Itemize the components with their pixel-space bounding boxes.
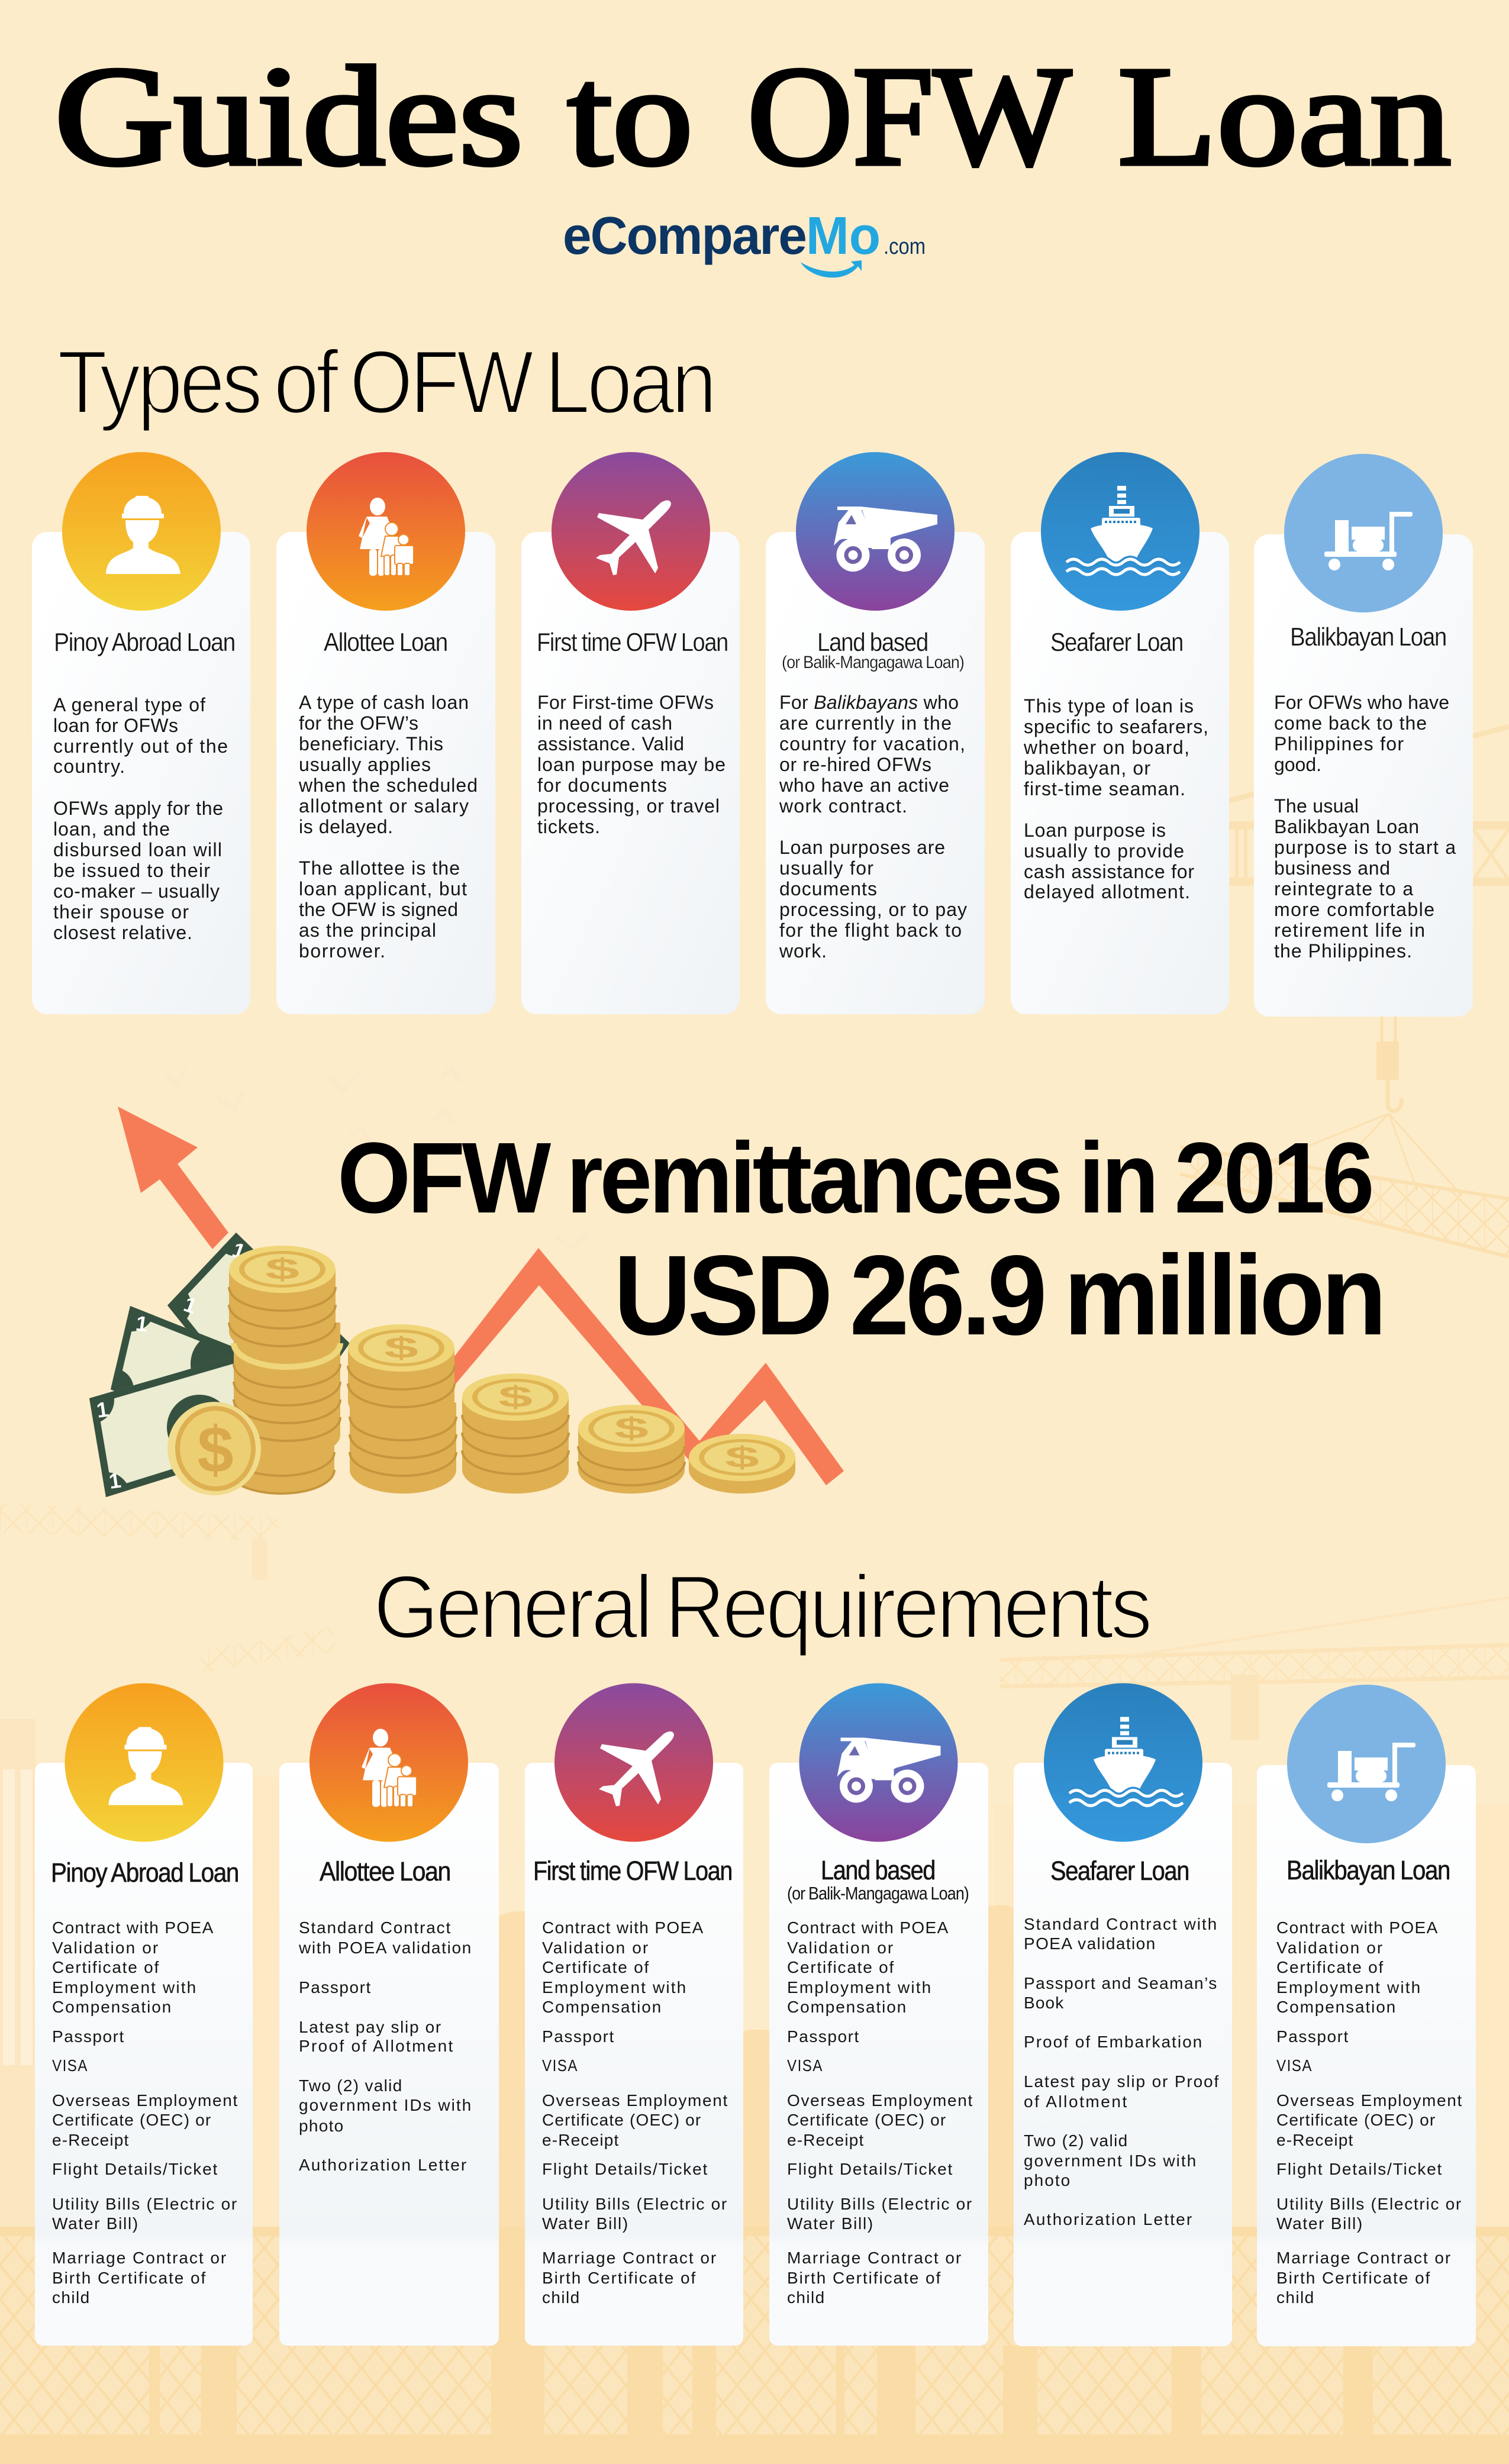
card text [779, 692, 968, 962]
card text: come back to the [1274, 712, 1428, 734]
requirements list: Validation or [542, 1939, 649, 1957]
card text: For OFWs who have [1274, 692, 1450, 713]
logo: eCompareMo: .com [884, 234, 926, 259]
requirements list: Employment with [1276, 1978, 1421, 1997]
title: OFW [747, 37, 1071, 195]
requirements list: Utility Bills (Electric or [1276, 2195, 1462, 2213]
logo: eCompareMo: eCompare [563, 207, 806, 266]
icon: ship [1041, 452, 1200, 611]
logo: eCompareMo: Mo [806, 207, 881, 266]
requirements list: Certificate (OEC) or [52, 2111, 212, 2129]
panel: types card Balikbayan Loan [1254, 454, 1473, 1017]
requirements list: Overseas Employment [787, 2091, 973, 2110]
requirements list: Birth Certificate of [542, 2269, 697, 2287]
stat: OFW remittances in 2016: OFW remittances in 2016 [337, 1122, 1371, 1234]
card text: specific to seafarers, [1024, 716, 1210, 737]
coin stack 5: $ [725, 1441, 759, 1474]
requirements list: Certificate of [52, 1958, 160, 1976]
card text: the Philippines. [1274, 940, 1413, 962]
fence [0, 2227, 1509, 2434]
requirements list: Latest pay slip or [299, 2018, 442, 2036]
requirements list: Compensation [787, 1998, 907, 2016]
card text: loan for OFWs [53, 715, 179, 736]
logo: eCompareMo [563, 207, 926, 278]
panel: types card Land based [766, 452, 985, 1014]
requirements list [298, 1918, 472, 2174]
card title: Pinoy Abroad Loan [54, 628, 235, 657]
card title: Seafarer Loan [1050, 1856, 1189, 1886]
requirements list: VISA [542, 2056, 578, 2075]
card text: Balikbayan Loan [1274, 816, 1420, 837]
card text: The allottee is the [299, 857, 461, 879]
card text: whether on board, [1023, 737, 1191, 758]
requirements list: child [1276, 2288, 1315, 2307]
coin stack 3 [462, 1373, 569, 1494]
title: Loan [1118, 37, 1451, 195]
banknotes: 1 [134, 1311, 149, 1337]
card text: OFWs apply for the [53, 798, 224, 819]
card text [298, 692, 479, 962]
requirements list: Flight Details/Ticket [787, 2160, 953, 2178]
requirements list: of Allotment [1024, 2092, 1128, 2111]
requirements list: Proof of Embarkation [1024, 2033, 1203, 2051]
coin stack 3: $ [498, 1381, 533, 1414]
banknotes: 1 [107, 1468, 122, 1494]
card text: usually applies [299, 754, 432, 775]
requirements list: Two (2) valid [299, 2076, 403, 2095]
requirements list [1276, 1918, 1463, 2307]
requirements list: Water Bill) [52, 2214, 139, 2233]
requirements list: Flight Details/Ticket [542, 2160, 708, 2178]
icon: airplane [554, 1683, 713, 1841]
card text: the OFW is signed [299, 899, 459, 920]
requirements list: Birth Certificate of [1276, 2269, 1431, 2287]
requirements list: Utility Bills (Electric or [787, 2195, 973, 2213]
requirements list: VISA [787, 2056, 823, 2075]
card text: when the scheduled [298, 775, 479, 796]
requirements list: POEA validation [1024, 1934, 1156, 1953]
panel: requirements card Land based [769, 1683, 988, 2346]
card title: Seafarer Loan [1050, 628, 1183, 657]
card text: is delayed. [299, 816, 394, 837]
requirements list: Validation or [787, 1939, 894, 1957]
card text [53, 694, 229, 943]
background: cranes, birds, buildings, people and fence [0, 727, 1509, 2464]
coin stack 5 [689, 1434, 795, 1494]
card text: country for vacation, [779, 733, 966, 754]
card title [787, 1855, 969, 1904]
requirements list: Utility Bills (Electric or [542, 2195, 728, 2213]
requirements list: Passport [1276, 2027, 1349, 2046]
chart line: zigzag [454, 1248, 844, 1485]
card title: Pinoy Abroad Loan [51, 1857, 238, 1888]
banknotes: 1 [180, 1292, 200, 1318]
coin stack 4 [578, 1405, 685, 1494]
card text: business and [1274, 857, 1391, 879]
requirements list: VISA [1276, 2056, 1313, 2075]
requirements list: e-Receipt [52, 2131, 130, 2149]
card text: first-time seaman. [1024, 778, 1186, 799]
panel: types card First time OFW Loan [521, 452, 740, 1014]
card text: For First-time OFWs [537, 692, 715, 713]
requirements list: Passport [52, 2027, 125, 2046]
card text: more comfortable [1274, 899, 1436, 920]
coin stack 2 [348, 1324, 456, 1494]
card text: assistance. Valid [537, 733, 685, 754]
requirements list: Passport [542, 2027, 615, 2046]
panel: types card Seafarer Loan [1011, 452, 1229, 1014]
panel: requirements card Pinoy Abroad Loan [35, 1683, 253, 2346]
card text: who have an active [779, 775, 950, 796]
requirements list: Water Bill) [542, 2214, 629, 2233]
requirements list: Flight Details/Ticket [1276, 2160, 1443, 2178]
card text: This type of loan is [1024, 695, 1195, 717]
card text: in need of cash [537, 712, 673, 734]
card text: purpose is to start a [1274, 837, 1457, 858]
coin stack 1: $ [265, 1253, 299, 1286]
requirements list [1024, 1915, 1220, 2228]
requirements list: Marriage Contract or [52, 2249, 227, 2267]
panel: types card Pinoy Abroad Loan [32, 452, 250, 1014]
banknotes: 1 [229, 1237, 249, 1264]
icon: luggage cart [1284, 454, 1443, 612]
requirements list: Authorization Letter [299, 2156, 467, 2174]
stat: USD 26.9 million: USD 26.9 million [614, 1231, 1383, 1359]
requirements list: e-Receipt [542, 2131, 620, 2149]
coin stack 1 [228, 1246, 340, 1494]
requirements list: Marriage Contract or [1276, 2249, 1452, 2267]
card text: A general type of [53, 694, 207, 715]
panel: requirements card Allottee Loan [279, 1683, 499, 2346]
icon: worker [62, 452, 221, 611]
requirements list [787, 1918, 973, 2307]
front coin [167, 1402, 261, 1495]
requirements list: Compensation [52, 1998, 172, 2016]
card text: balikbayan, or [1024, 757, 1152, 779]
crane lower right [1000, 1598, 1509, 1740]
front coin: $ [197, 1414, 234, 1486]
requirements list: Marriage Contract or [787, 2249, 962, 2267]
card text: closest relative. [53, 922, 194, 943]
requirements list [542, 1918, 728, 2307]
requirements list: Marriage Contract or [542, 2249, 717, 2267]
icon: worker [65, 1683, 224, 1841]
card text: currently out of the [53, 736, 229, 757]
requirements list: Two (2) valid [1024, 2131, 1128, 2150]
requirements list: Certificate of [542, 1958, 650, 1976]
card text: cash assistance for [1024, 861, 1195, 882]
card text: Philippines for [1274, 733, 1405, 754]
requirements list: Contract with POEA [1276, 1918, 1439, 1937]
card text: work contract. [779, 795, 908, 817]
card title: Allottee Loan [320, 1856, 450, 1886]
panel: requirements card Balikbayan Loan [1257, 1685, 1476, 2346]
requirements list: Contract with POEA [787, 1918, 949, 1937]
panel: types card Allottee Loan [276, 452, 495, 1014]
requirements list: Certificate (OEC) or [787, 2111, 947, 2129]
requirements list: Overseas Employment [1276, 2091, 1463, 2110]
requirements list: Birth Certificate of [787, 2269, 941, 2287]
requirements list: child [542, 2288, 581, 2307]
card title [782, 628, 964, 672]
icon: ship [1044, 1683, 1202, 1841]
icon: dump truck [799, 1683, 957, 1841]
card title: First time OFW Loan [537, 628, 728, 657]
requirements list: e-Receipt [1276, 2131, 1354, 2149]
requirements list: Standard Contract [299, 1918, 452, 1937]
card text: co-maker – usually [53, 881, 221, 902]
card text: good. [1274, 754, 1323, 775]
requirements list: Certificate of [1276, 1958, 1384, 1976]
card text: allotment or salary [299, 795, 470, 817]
card text: The usual [1274, 795, 1360, 817]
requirements list: e-Receipt [787, 2131, 865, 2149]
requirements list: government IDs with [299, 2096, 472, 2114]
requirements list: Employment with [787, 1978, 932, 1997]
card text: Loan purposes are [779, 837, 946, 858]
card text: usually for [779, 857, 875, 879]
card title: Land based [817, 628, 928, 657]
title: Guides [54, 37, 523, 195]
icon: family [309, 1683, 468, 1841]
birds [166, 1067, 588, 1247]
requirements list [52, 1918, 238, 2307]
requirements list: Latest pay slip or Proof [1024, 2072, 1220, 2091]
requirements list: Overseas Employment [52, 2091, 238, 2110]
requirements list: Compensation [1276, 1998, 1397, 2016]
card text: reintegrate to a [1274, 878, 1414, 899]
requirements list: Employment with [542, 1978, 687, 1997]
card title: First time OFW Loan [533, 1856, 732, 1886]
card text: for documents [537, 775, 668, 796]
banknotes [89, 1233, 349, 1497]
crane top right [1124, 727, 1509, 882]
card text: usually to provide [1024, 840, 1185, 862]
card title: Allottee Loan [324, 628, 447, 657]
icon: airplane [552, 452, 710, 611]
card text: processing, or to pay [779, 899, 968, 920]
requirements list: Water Bill) [787, 2214, 874, 2233]
title: to [568, 37, 693, 195]
requirements list: photo [299, 2117, 344, 2135]
title [54, 37, 1451, 195]
card text [1023, 695, 1210, 902]
icon: luggage cart [1287, 1685, 1446, 1843]
card title: Balikbayan Loan [1286, 1855, 1450, 1885]
card text: beneficiary. This [299, 733, 444, 754]
requirements list: photo [1024, 2171, 1071, 2189]
requirements list: Validation or [1276, 1939, 1384, 1957]
card text: loan purpose may be [537, 754, 727, 775]
requirements list: VISA [52, 2056, 88, 2075]
card text: delayed allotment. [1024, 881, 1191, 902]
card text: or re-hired OFWs [779, 754, 933, 775]
requirements list: Flight Details/Ticket [52, 2160, 218, 2178]
requirements list: Passport [299, 1978, 372, 1997]
requirements list: Compensation [542, 1998, 662, 2016]
card text: retirement life in [1274, 920, 1426, 941]
requirements list: Certificate (OEC) or [1276, 2111, 1436, 2129]
coin stack 2: $ [384, 1331, 418, 1365]
requirements list: Contract with POEA [542, 1918, 704, 1937]
card text: documents [779, 878, 878, 899]
card text: work. [779, 940, 828, 962]
card text: disbursed loan will [53, 839, 223, 860]
card text: tickets. [537, 816, 601, 837]
requirements list: Book [1024, 1994, 1065, 2012]
requirements list: Standard Contract with [1024, 1915, 1218, 1933]
card text: their spouse or [53, 901, 190, 923]
card title: (or Balik-Mangagawa Loan) [782, 653, 964, 672]
panel: requirements card Seafarer Loan [1014, 1683, 1232, 2346]
card text: For Balikbayans who [779, 692, 960, 713]
requirements list: Overseas Employment [542, 2091, 728, 2110]
requirements list: government IDs with [1024, 2152, 1197, 2170]
requirements list: Passport [787, 2027, 860, 2046]
requirements list: with POEA validation [298, 1939, 472, 1957]
card text: are currently in the [779, 712, 953, 734]
requirements list: Passport and Seaman’s [1024, 1974, 1218, 1992]
card text: Loan purpose is [1024, 820, 1167, 841]
card title: Balikbayan Loan [1290, 623, 1446, 652]
requirements list: Contract with POEA [52, 1918, 214, 1937]
requirements list: Certificate (OEC) or [542, 2111, 702, 2129]
illustration: rising arrow, falling line, bills and coin stacks [67, 1107, 844, 1520]
crane left [0, 1503, 337, 1672]
card text: as the principal [299, 920, 437, 941]
card text: loan, and the [53, 818, 171, 840]
card text: loan applicant, but [299, 878, 468, 899]
requirements list: Employment with [52, 1978, 197, 1997]
arrow: rising [118, 1107, 228, 1249]
requirements list: Proof of Allotment [299, 2037, 454, 2055]
panel: requirements card First time OFW Loan [525, 1683, 743, 2346]
card title: (or Balik-Mangagawa Loan) [787, 1883, 969, 1904]
card text: be issued to their [53, 860, 211, 881]
card text: borrower. [299, 940, 386, 962]
requirements list: Certificate of [787, 1958, 895, 1976]
requirements list: Birth Certificate of [52, 2269, 207, 2287]
card title: Land based [821, 1855, 935, 1885]
card text: processing, or travel [537, 795, 721, 817]
crane boom with hook [1180, 1017, 1509, 1257]
card text: for the flight back to [779, 920, 963, 941]
requirements list: Authorization Letter [1024, 2210, 1193, 2228]
requirements list: Validation or [52, 1939, 159, 1957]
heading: Types of OFW Loan: Types of OFW Loan [57, 332, 714, 433]
requirements list: Water Bill) [1276, 2214, 1363, 2233]
icon: family [307, 452, 465, 611]
card text: A type of cash loan [299, 692, 470, 713]
icon: dump truck [796, 452, 955, 611]
heading: General Requirements: General Requirements [373, 1557, 1150, 1657]
coin stack 4: $ [614, 1412, 649, 1445]
card text [1274, 692, 1457, 962]
requirements list: Utility Bills (Electric or [52, 2195, 238, 2213]
card text: country. [53, 756, 126, 777]
requirements list: child [52, 2288, 91, 2307]
requirements list: child [787, 2288, 826, 2307]
card text [537, 692, 727, 837]
card text: for the OFW’s [299, 712, 420, 734]
banknotes: 1 [95, 1397, 110, 1423]
